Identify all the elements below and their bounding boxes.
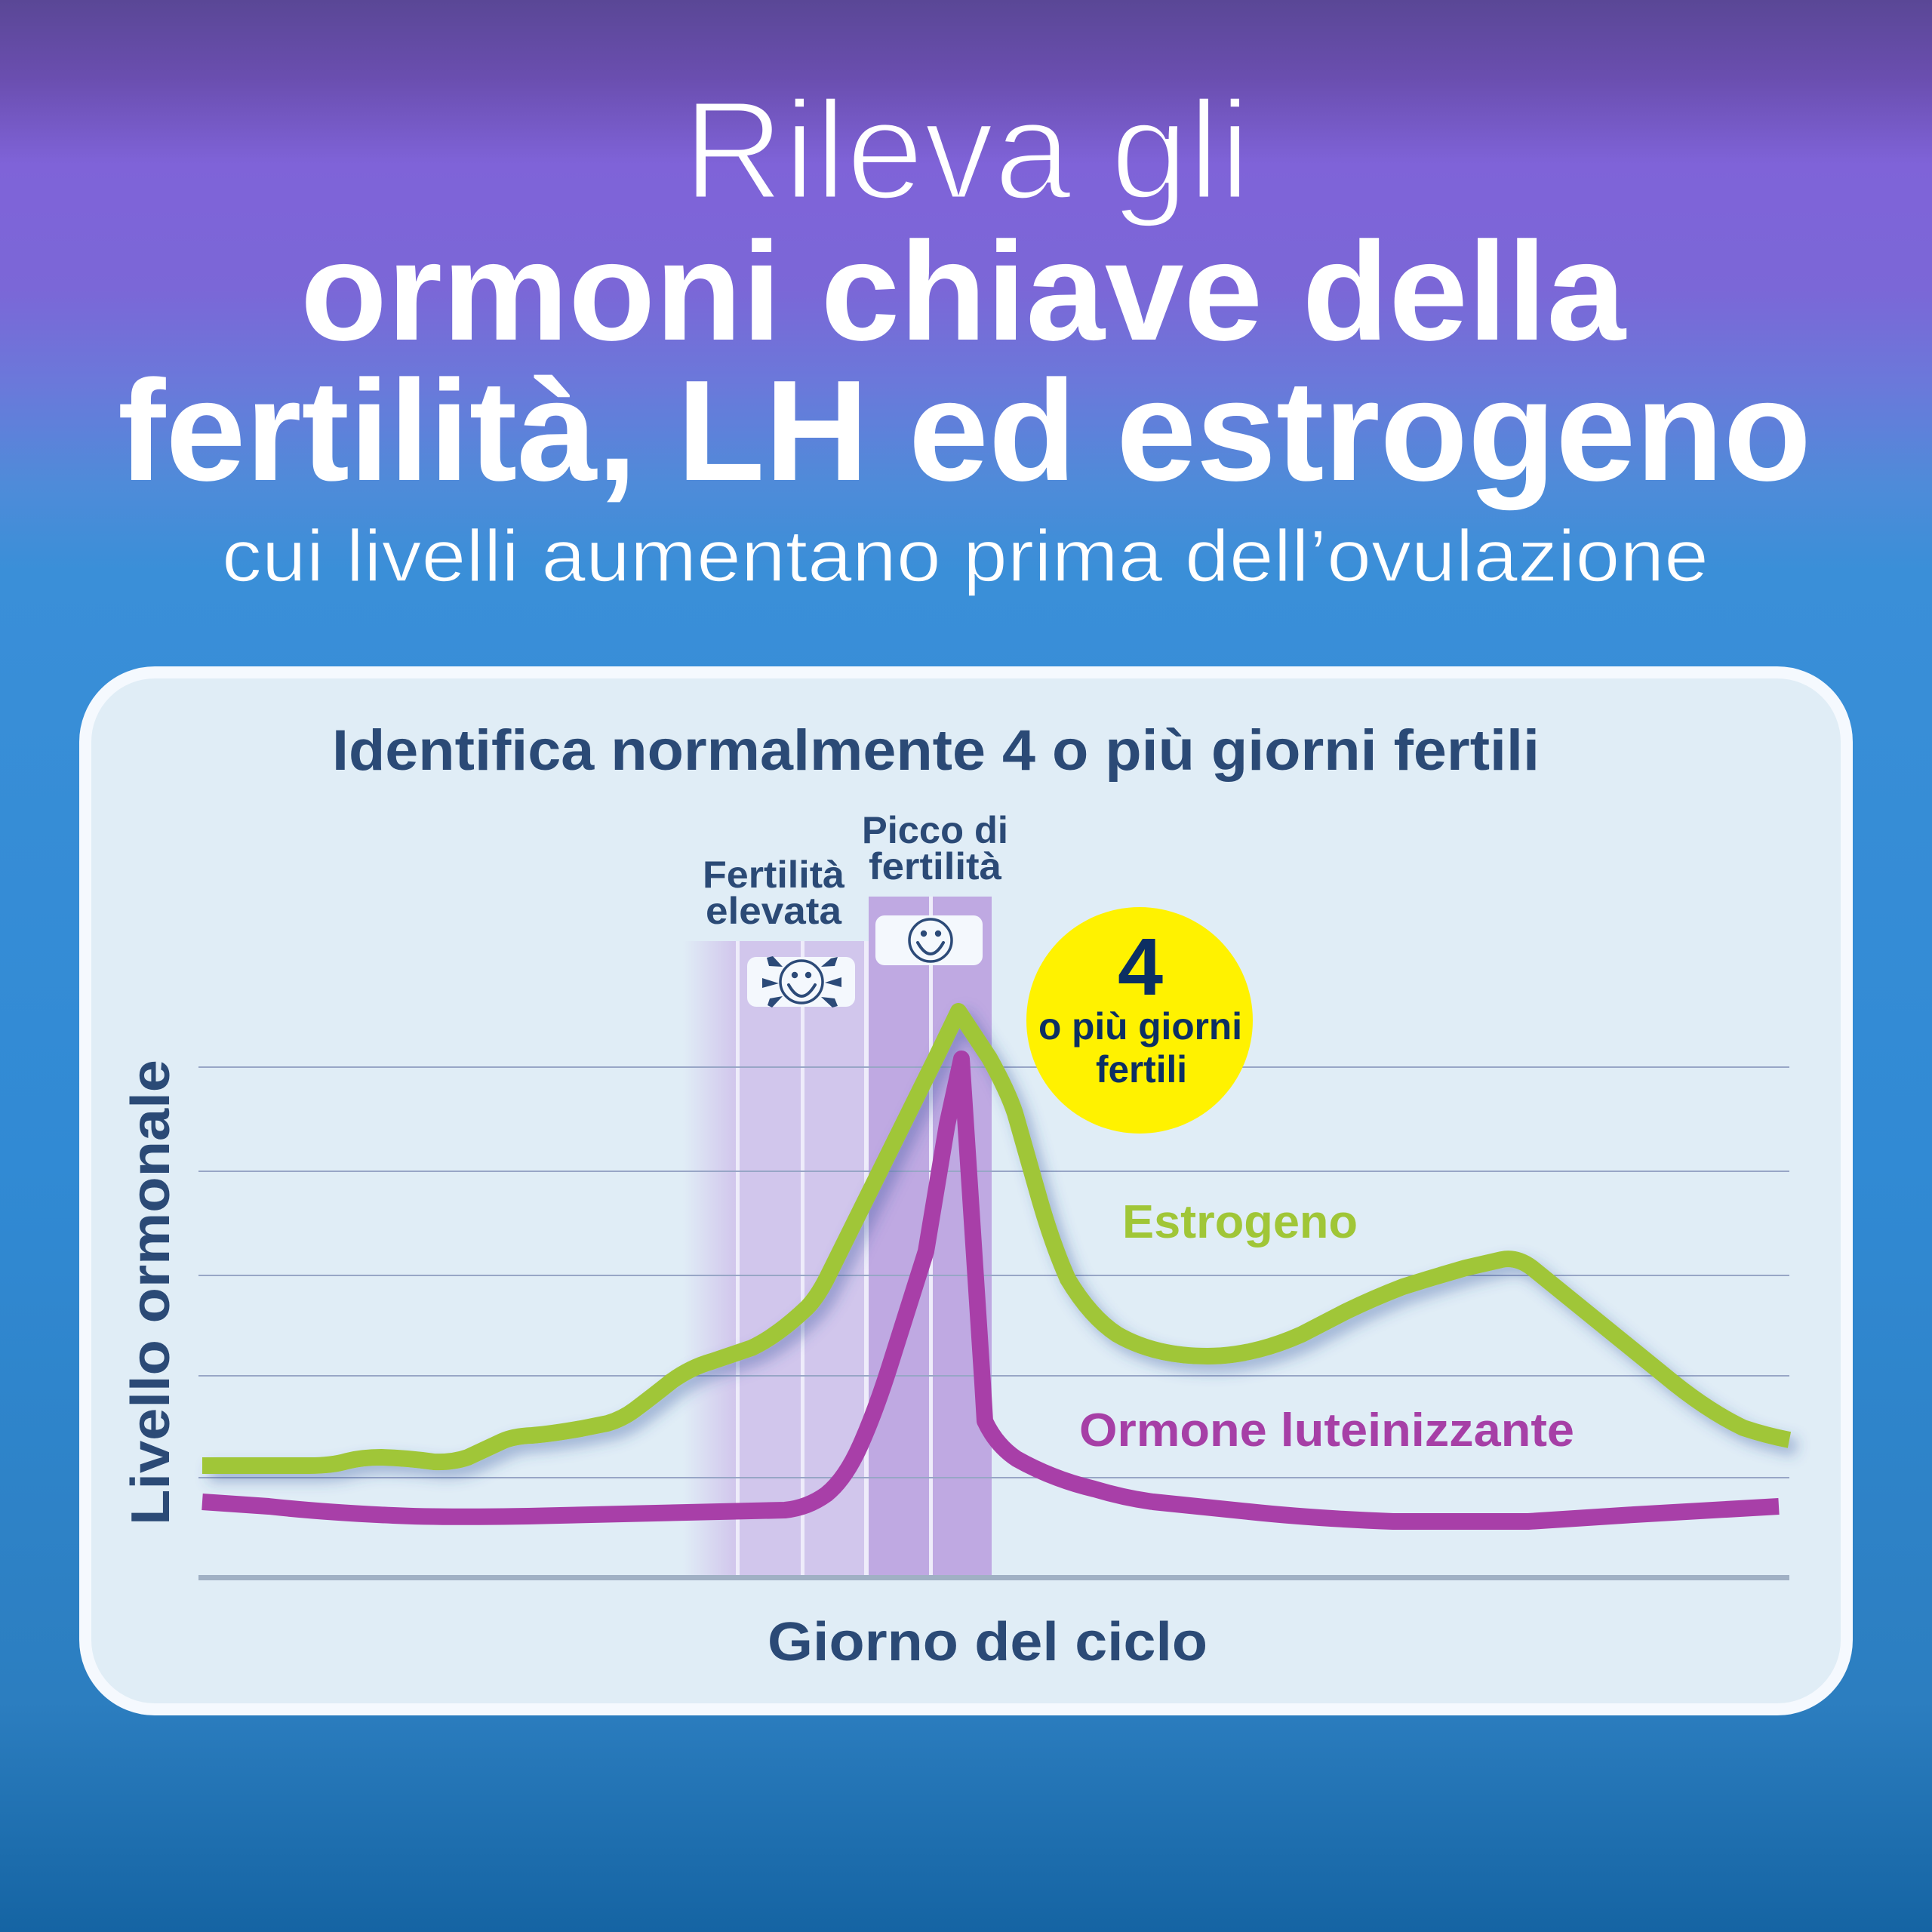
- icon: flashing smiley tag: [747, 956, 855, 1008]
- x axis label: Giorno del ciclo: [768, 1612, 1208, 1672]
- callout: 4 or more fertile days: [1026, 907, 1253, 1134]
- callout: 4 or more fertile days: fertili: [1096, 1048, 1187, 1091]
- estrogen curve: [202, 1011, 1789, 1466]
- title line: ormoni chiave della: ormoni chiave della: [300, 214, 1627, 370]
- y axis label: Livello ormonale: [121, 1060, 181, 1525]
- panel: chart card: [85, 672, 1847, 1709]
- horizontal grid lines: [198, 1067, 1789, 1478]
- label: high fertility: elevata: [706, 890, 842, 932]
- label: luteinizing hormone: Ormone luteinizzante: [1079, 1404, 1574, 1457]
- band: high fertility days: [683, 941, 866, 1575]
- callout: 4 or more fertile days: 4: [1118, 921, 1163, 1012]
- luteinizing hormone curve: [202, 1059, 1779, 1521]
- subtitle: cui livelli aumentano prima dell’ovulazione: [222, 515, 1709, 597]
- label: high fertility: [703, 854, 844, 932]
- title line: Rileva gli: Rileva gli: [683, 72, 1251, 229]
- label: estrogen: Estrogeno: [1122, 1196, 1358, 1248]
- band: peak fertility days: [864, 897, 992, 1575]
- x axis: [198, 1575, 1789, 1580]
- icon: static smiley tag: [875, 915, 983, 965]
- panel heading: Identifica normalmente 4 o più giorni fertili: [332, 718, 1540, 783]
- label: peak fertility: fertilità: [869, 845, 1001, 888]
- label: high fertility: Fertilità: [703, 854, 844, 896]
- title: [118, 72, 1811, 597]
- label: peak fertility: [862, 809, 1008, 888]
- title line: fertilità, LH ed estrogeno: fertilità, LH ed estrogeno: [118, 351, 1811, 511]
- callout: 4 or more fertile days: o più giorni: [1038, 1005, 1242, 1048]
- label: peak fertility: Picco di: [862, 809, 1008, 851]
